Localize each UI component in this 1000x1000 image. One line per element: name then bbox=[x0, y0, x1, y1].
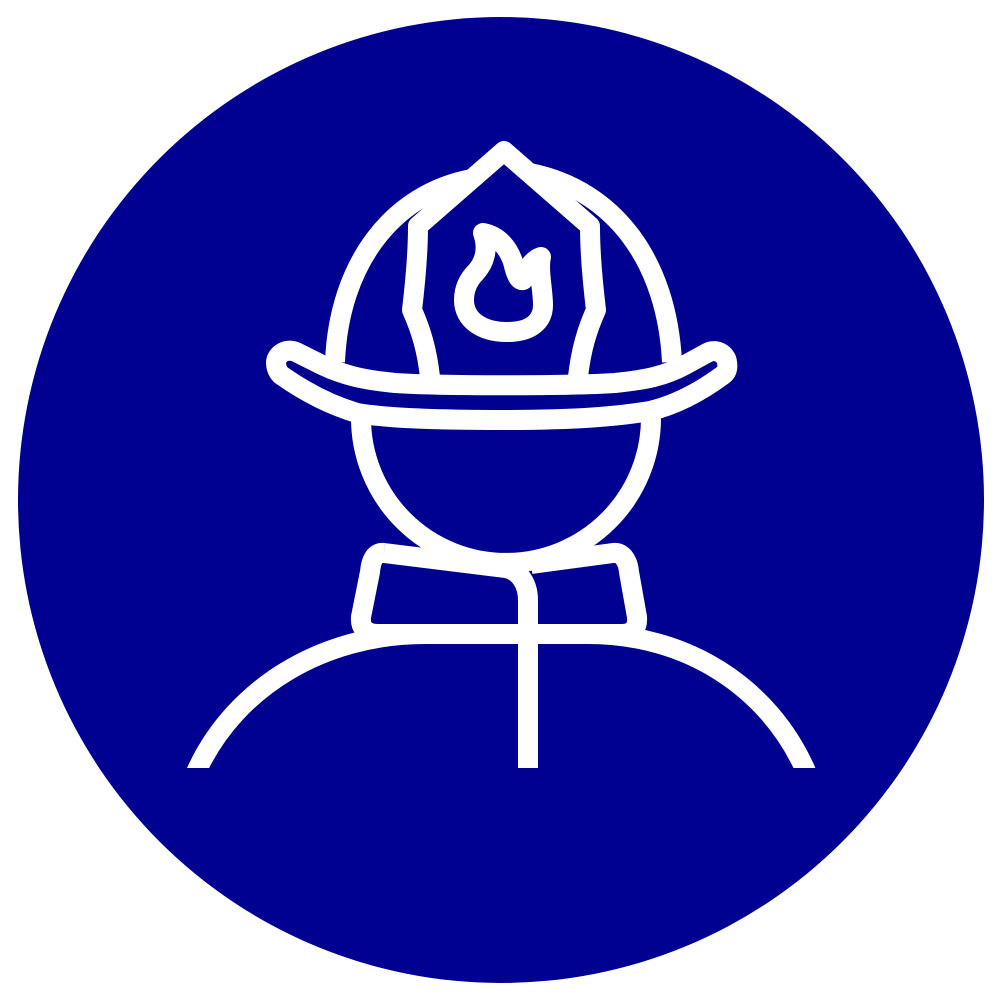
helmet brim bbox=[276, 351, 727, 420]
helmet dome bbox=[335, 173, 672, 362]
flame badge bbox=[464, 233, 543, 332]
coat seam bbox=[518, 634, 538, 770]
helmet shield bbox=[412, 151, 596, 377]
collar bbox=[361, 553, 637, 634]
shoulders bbox=[190, 634, 812, 785]
head bbox=[361, 418, 651, 563]
firefighter figure bbox=[190, 151, 812, 785]
